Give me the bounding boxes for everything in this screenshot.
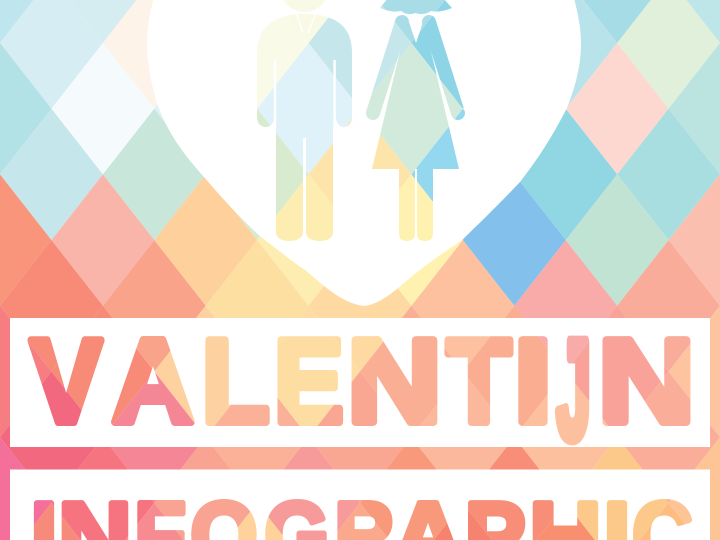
- subtitle box: INFOGRAPHIC: [10, 470, 710, 540]
- icon: man figure: [257, 0, 352, 241]
- man: head: [280, 0, 328, 12]
- woman: right arm: [429, 22, 458, 113]
- woman: hair: [380, 0, 452, 14]
- woman: left arm: [373, 22, 402, 113]
- icon: woman figure: [372, 0, 459, 241]
- title text: V: [30, 315, 102, 448]
- woman: dress and legs: [372, 22, 459, 241]
- title text: J: [557, 311, 591, 468]
- title text: N: [347, 315, 442, 448]
- title text: N: [598, 315, 695, 448]
- title text: A: [112, 315, 194, 448]
- man: arm and collar gaps: [275, 13, 335, 128]
- title box: VALENTIJN: [10, 311, 710, 468]
- man: suit and legs: [257, 14, 352, 241]
- title text: T: [447, 315, 511, 448]
- icon: white heart: [147, 0, 581, 306]
- title text: L: [202, 315, 269, 448]
- title text: I: [514, 315, 552, 448]
- title text: E: [274, 315, 344, 448]
